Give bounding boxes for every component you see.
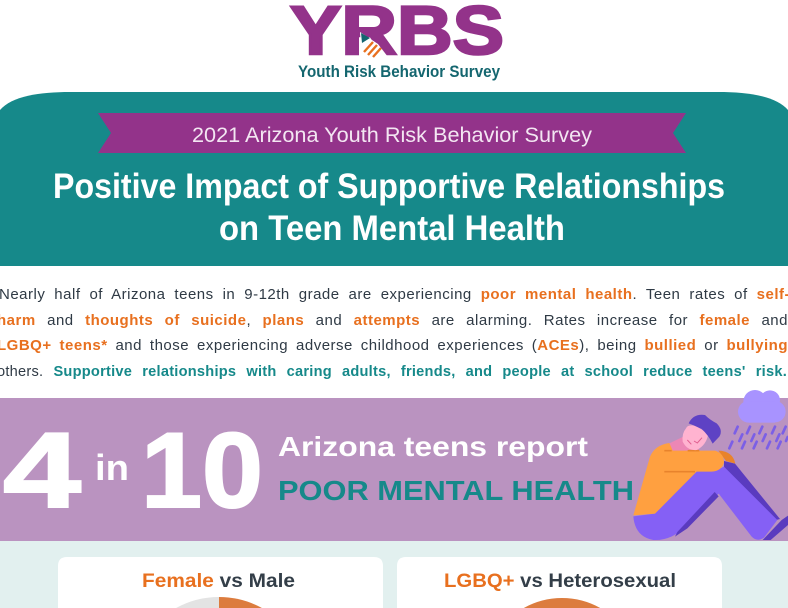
torso and arm (633, 443, 724, 515)
heading: Female vs Male (142, 571, 295, 592)
hair (689, 415, 721, 444)
far foot (763, 516, 788, 540)
statistic caption (278, 431, 634, 506)
panel: 4 in 10 statistic band (0, 390, 788, 541)
text block: introduction: others. Supportive relationships with caring adults, friends, and people at school reduce teens' risk. (0, 364, 787, 380)
panel: header banner (0, 92, 788, 266)
ribbon (98, 113, 686, 153)
text block: introduction: harm and thoughts of suicide, plans and attempts are alarming. Rates increase for female and (0, 312, 788, 329)
statistic caption: POOR MENTAL HEALTH (278, 475, 634, 506)
logo tagline: Youth Risk Behavior Survey (298, 62, 500, 81)
near leg (633, 467, 777, 540)
icon: pencil (360, 32, 388, 57)
thigh shadow (675, 492, 719, 537)
far leg (724, 461, 780, 522)
text block: introduction (0, 286, 788, 380)
big statistic: in (95, 447, 129, 488)
big statistic: 4 (3, 410, 81, 530)
text block: introduction: Nearly half of Arizona teens in 9-12th grade are experiencing poor mental health. Teen rates of self- (0, 286, 788, 303)
ribbon text: 2021 Arizona Youth Risk Behavior Survey (192, 124, 593, 147)
title: Positive Impact of Supportive Relationships (53, 167, 725, 206)
heading: LGBQ+ vs Heterosexual (444, 571, 676, 592)
donut chart (176, 597, 262, 608)
statistic caption: Arizona teens report (278, 431, 588, 462)
icon: sad teen under rain cloud (633, 390, 788, 540)
icon: rain (729, 427, 788, 448)
head (682, 425, 708, 450)
big statistic: 10 (141, 410, 263, 530)
panel: LGBQ+ vs heterosexual (397, 557, 722, 608)
panel: female vs male (58, 557, 383, 608)
text block: introduction: LGBQ+ teens* and those experiencing adverse childhood experiences (ACEs), being bullied or bullying (0, 337, 788, 354)
icon: cloud (738, 390, 786, 423)
title: on Teen Mental Health (219, 209, 565, 248)
big statistic (3, 410, 263, 530)
panel: comparison section background (0, 541, 788, 608)
donut chart (524, 598, 600, 608)
sleeve cuff (718, 451, 735, 464)
title (53, 167, 725, 248)
neck (669, 437, 700, 451)
